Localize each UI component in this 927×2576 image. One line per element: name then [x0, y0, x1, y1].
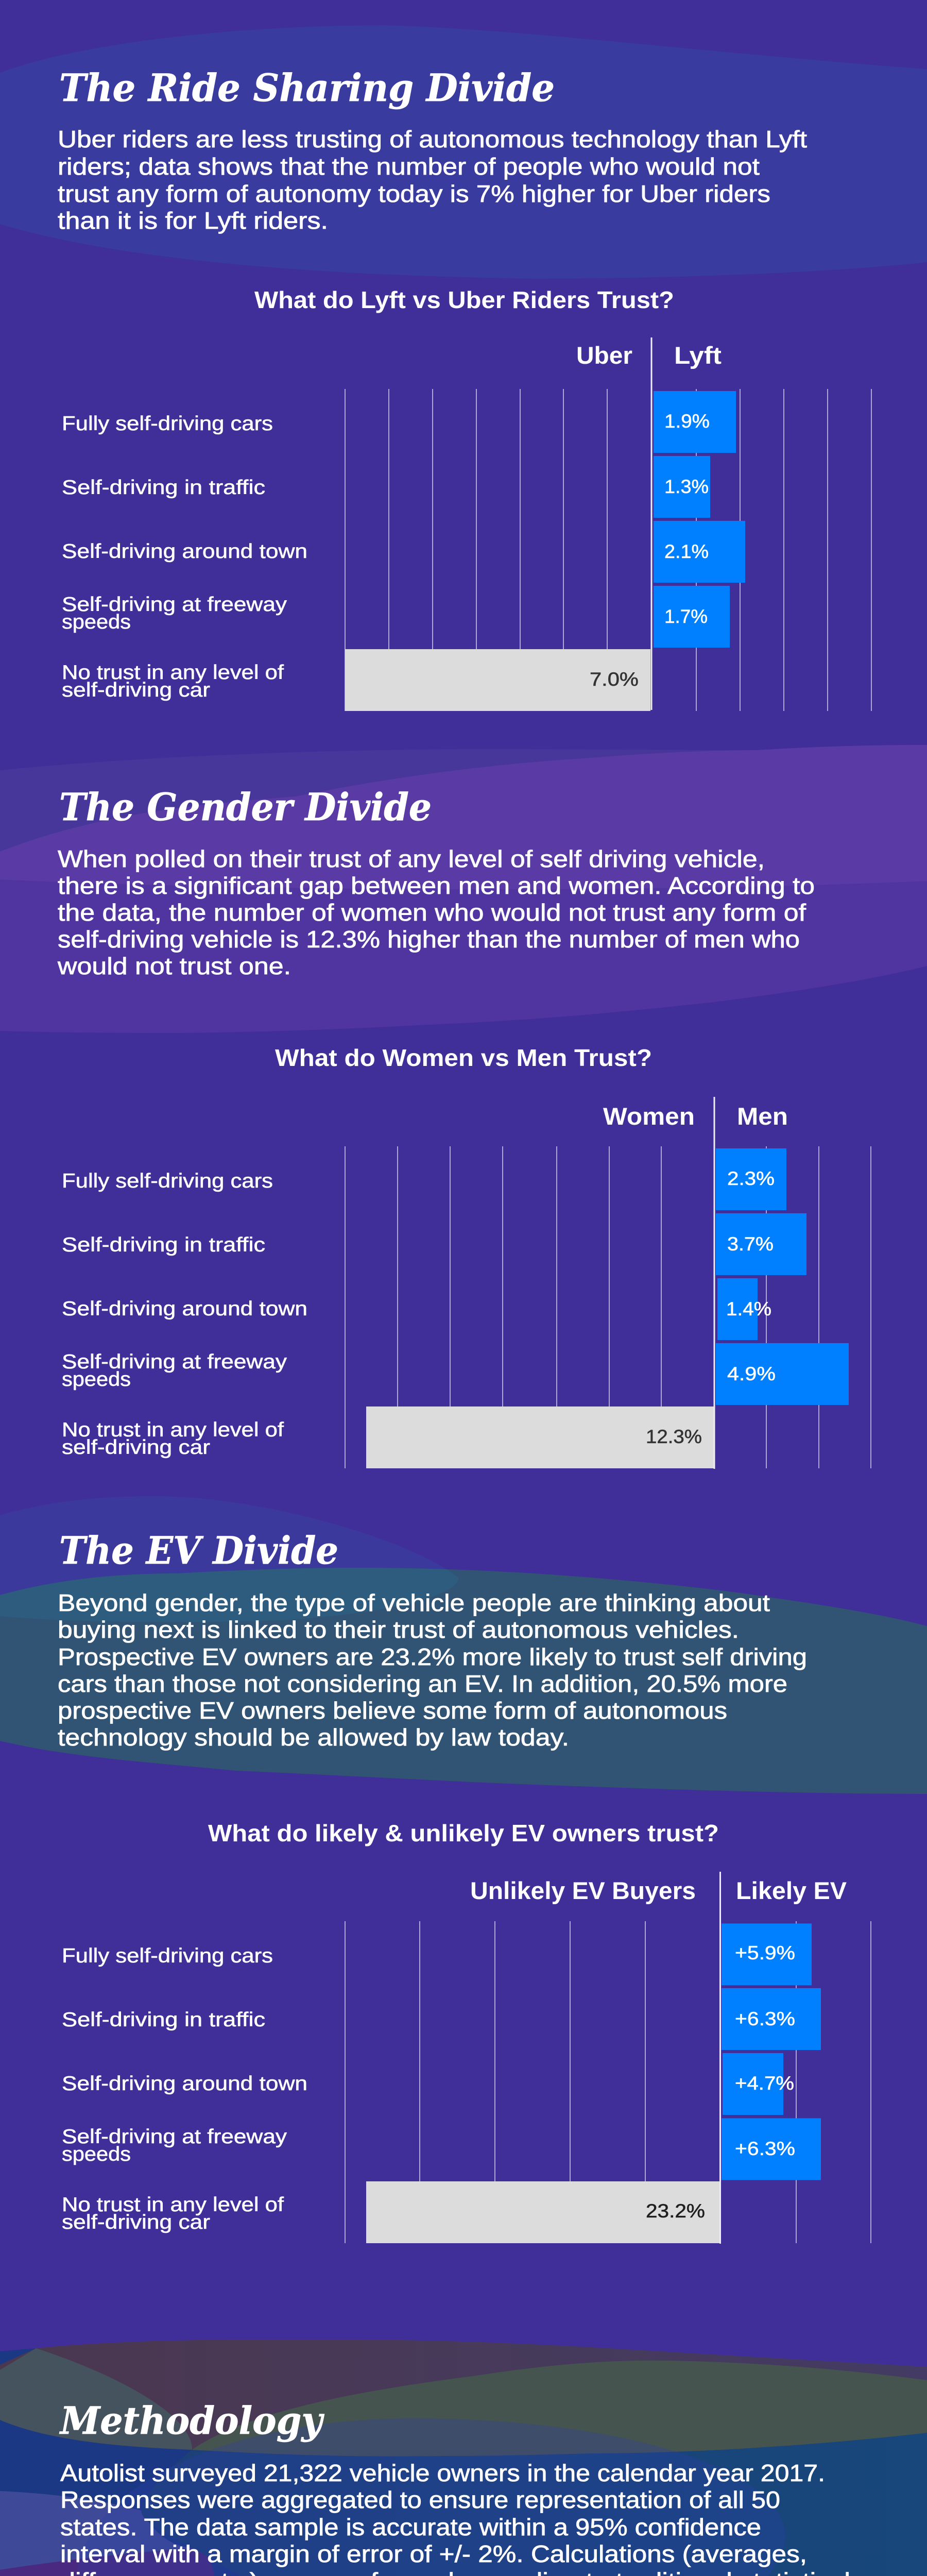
bar: 7.0%: 7.0% [590, 669, 639, 690]
bar chart: women vs men [62, 1097, 871, 1469]
row labels [62, 413, 307, 701]
row labels [62, 1945, 307, 2233]
row labels: Self-driving at freeway [62, 2126, 287, 2148]
text block: EV intro: prospective EV owners believe some form of autonomous [58, 1697, 727, 1724]
bar: +6.3% freeway [722, 2119, 821, 2180]
row labels: speeds [62, 611, 131, 633]
bar: 4.9% [716, 1343, 849, 1405]
text block: EV intro: Prospective EV owners are 23.2% more likely to trust self driving [58, 1643, 807, 1670]
bar: +4.7%: +4.7% [735, 2073, 794, 2094]
bar: +6.3% freeway: +6.3% [735, 2138, 795, 2159]
series labels: Men [737, 1103, 788, 1130]
bar: +5.9%: +5.9% [735, 1942, 795, 1963]
series labels: Women [603, 1103, 695, 1130]
chart title: EV owners: What do likely & unlikely EV owners trust? [208, 1820, 719, 1846]
bar: 2.3% [716, 1148, 786, 1210]
chart title: Lyft vs Uber: What do Lyft vs Uber Riders Trust? [254, 286, 674, 313]
bar: 1.3%: 1.3% [664, 476, 709, 497]
bar: 1.9%: 1.9% [664, 411, 710, 432]
series labels: Uber [576, 342, 632, 369]
text block: gender intro: self-driving vehicle is 12.3% higher than the number of men who [58, 926, 800, 953]
row labels: Self-driving at freeway [62, 594, 287, 616]
bar: 12.3%: 12.3% [646, 1426, 702, 1447]
background blob: ride sharing [0, 25, 927, 279]
bar: 4.9%: 4.9% [727, 1363, 776, 1384]
text block: methodology [60, 2460, 850, 2576]
series labels: Unlikely EV Buyers [470, 1877, 696, 1904]
row labels: Self-driving in traffic [62, 1234, 265, 1256]
series labels [470, 1877, 847, 1904]
row labels: Self-driving in traffic [62, 477, 265, 499]
series labels: Lyft [674, 342, 722, 369]
text block: EV intro: cars than those not considering an EV. In addition, 20.5% more [58, 1670, 787, 1697]
row labels: self-driving car [62, 2211, 210, 2233]
bar: 1.4% [717, 1278, 771, 1340]
text block: ride sharing intro: Uber riders are less trusting of autonomous technology than Lyft [58, 126, 807, 152]
bar: +5.9% [722, 1924, 812, 1986]
row labels: Self-driving at freeway [62, 1351, 287, 1373]
series labels [576, 342, 722, 369]
series labels [603, 1103, 788, 1130]
bar: 23.2% [366, 2181, 719, 2243]
background blobs: gender [0, 745, 927, 1033]
row labels: self-driving car [62, 679, 210, 701]
text block: gender intro: When polled on their trust of any level of self driving vehicle, [58, 845, 765, 872]
heading: methodology: Methodology [59, 2399, 324, 2443]
row labels: Self-driving around town [62, 1298, 307, 1320]
series labels: Likely EV [736, 1877, 847, 1904]
panel: methodology [0, 2340, 927, 2576]
bar: +6.3% traffic: +6.3% [735, 2008, 795, 2029]
bar: 1.4%: 1.4% [726, 1298, 771, 1319]
chart title: women vs men: What do Women vs Men Trust? [275, 1044, 652, 1071]
text block: ride sharing intro: than it is for Lyft riders. [58, 207, 328, 234]
bar: 23.2%: 23.2% [646, 2200, 705, 2222]
row labels: Fully self-driving cars [62, 1945, 273, 1967]
bar: 1.7% [654, 586, 730, 648]
panel: gender divide [0, 745, 927, 1469]
text block: gender intro: the data, the number of women who would not trust any form of [58, 899, 806, 926]
background blobs: EV [0, 1496, 927, 1794]
bar: 3.7%: 3.7% [727, 1233, 774, 1255]
heading: ride sharing: The Ride Sharing Divide [59, 66, 555, 110]
text block: EV intro: Beyond gender, the type of vehicle people are thinking about [58, 1589, 770, 1616]
bar: +4.7% [723, 2053, 794, 2115]
background blobs: methodology [0, 2340, 927, 2576]
text block: ride sharing intro: trust any form of autonomy today is 7% higher for Uber riders [58, 180, 770, 207]
text block: EV intro [58, 1589, 807, 1751]
text block: methodology: states. The data sample is accurate within a 95% confidence [60, 2514, 761, 2540]
bar: 2.3%: 2.3% [727, 1168, 775, 1189]
row labels: No trust in any level of [62, 1419, 284, 1441]
heading: gender: The Gender Divide [59, 785, 432, 829]
bar: 3.7% [716, 1213, 806, 1275]
bar: 12.3% [366, 1406, 714, 1468]
bar: +6.3% traffic [722, 1988, 821, 2050]
panel: EV divide [0, 1496, 927, 2244]
row labels: No trust in any level of [62, 2194, 284, 2216]
row labels: speeds [62, 1368, 131, 1391]
text block: ride sharing intro [58, 126, 807, 234]
row labels: Fully self-driving cars [62, 413, 273, 435]
heading: EV: The EV Divide [59, 1529, 338, 1573]
row labels: speeds [62, 2143, 131, 2165]
text block: methodology: interval with a margin of error of +/- 2%. Calculations (averages, [60, 2540, 807, 2567]
bar: 1.7%: 1.7% [664, 606, 708, 627]
bar chart: EV owners [62, 1872, 871, 2244]
row labels: Self-driving around town [62, 540, 307, 563]
row labels: Self-driving in traffic [62, 2009, 265, 2031]
row labels: self-driving car [62, 1436, 210, 1459]
bar: 1.3% [654, 456, 710, 518]
bar: 7.0% [345, 649, 650, 711]
text block: gender intro [57, 845, 815, 979]
text block: methodology: Responses were aggregated to ensure representation of all 50 [60, 2486, 780, 2513]
text block: EV intro: technology should be allowed by law today. [58, 1724, 569, 1751]
row labels [62, 1170, 307, 1459]
text block: methodology: Autolist surveyed 21,322 vehicle owners in the calendar year 2017. [60, 2460, 825, 2486]
row labels: Fully self-driving cars [62, 1170, 273, 1192]
text block: ride sharing intro: riders; data shows that the number of people who would not [58, 153, 760, 180]
bar chart: Lyft vs Uber [62, 337, 871, 711]
text block: gender intro: would not trust one. [57, 953, 291, 979]
panel: ride sharing divide [0, 25, 927, 711]
row labels: Self-driving around town [62, 2073, 307, 2095]
text block: EV intro: buying next is linked to their trust of autonomous vehicles. [58, 1616, 739, 1643]
bar: 2.1%: 2.1% [664, 541, 709, 562]
row labels: No trust in any level of [62, 662, 284, 684]
bar: 2.1% [654, 521, 745, 583]
text block: gender intro: there is a significant gap between men and women. According to [58, 872, 815, 899]
bar: 1.9% [654, 391, 736, 453]
